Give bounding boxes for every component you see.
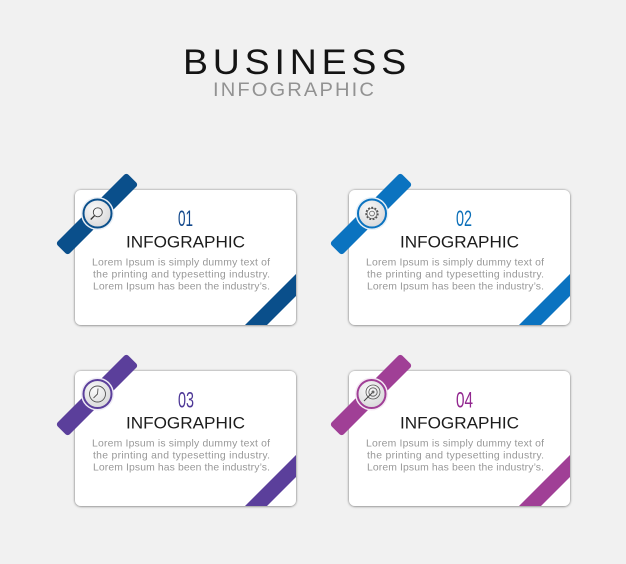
heading: INFOGRAPHIC <box>400 414 519 432</box>
body text: the printing and typesetting industry. <box>93 270 270 280</box>
diagonal ribbon <box>56 173 138 255</box>
icon: target <box>355 378 388 410</box>
corner ribbon <box>245 455 296 506</box>
body text: Lorem Ipsum has been the industry’s. <box>367 462 544 474</box>
card background <box>349 371 570 506</box>
number: 04 <box>456 388 473 412</box>
panel: card 04 <box>330 354 570 506</box>
number: 01 <box>178 206 193 231</box>
panel: card 03 <box>56 354 296 506</box>
diagonal ribbon <box>330 173 412 255</box>
card background <box>349 190 570 325</box>
body text: the printing and typesetting industry. <box>93 450 270 462</box>
body text <box>366 258 544 292</box>
diagonal ribbon <box>56 354 138 436</box>
diagonal ribbon <box>330 354 412 436</box>
body text: Lorem Ipsum is simply dummy text of <box>366 438 544 450</box>
heading: INFOGRAPHIC <box>126 414 245 432</box>
number: 02 <box>456 206 472 231</box>
card background <box>75 190 296 325</box>
corner ribbon <box>519 455 570 506</box>
body text <box>92 258 270 292</box>
body text <box>92 438 270 474</box>
body text: the printing and typesetting industry. <box>367 450 544 462</box>
subtitle: INFOGRAPHIC <box>213 80 376 101</box>
body text <box>366 438 544 474</box>
panel: card 02 <box>330 173 570 325</box>
number: 03 <box>178 388 194 412</box>
icon: magnifier <box>81 197 114 230</box>
body text: the printing and typesetting industry. <box>367 270 544 280</box>
body text: Lorem Ipsum is simply dummy text of <box>92 438 270 450</box>
body text: Lorem Ipsum is simply dummy text of <box>92 258 270 268</box>
body text: Lorem Ipsum has been the industry’s. <box>93 462 270 474</box>
icon: clock <box>81 378 114 410</box>
body text: Lorem Ipsum is simply dummy text of <box>366 258 544 268</box>
body text: Lorem Ipsum has been the industry’s. <box>93 282 270 292</box>
corner ribbon <box>245 274 296 325</box>
panel: card 01 <box>56 173 296 325</box>
card background <box>75 371 296 506</box>
heading: INFOGRAPHIC <box>400 234 519 252</box>
title: BUSINESS <box>183 43 411 82</box>
icon: gear <box>356 197 388 230</box>
heading: INFOGRAPHIC <box>126 234 245 252</box>
corner ribbon <box>519 274 570 325</box>
body text: Lorem Ipsum has been the industry’s. <box>367 282 544 292</box>
